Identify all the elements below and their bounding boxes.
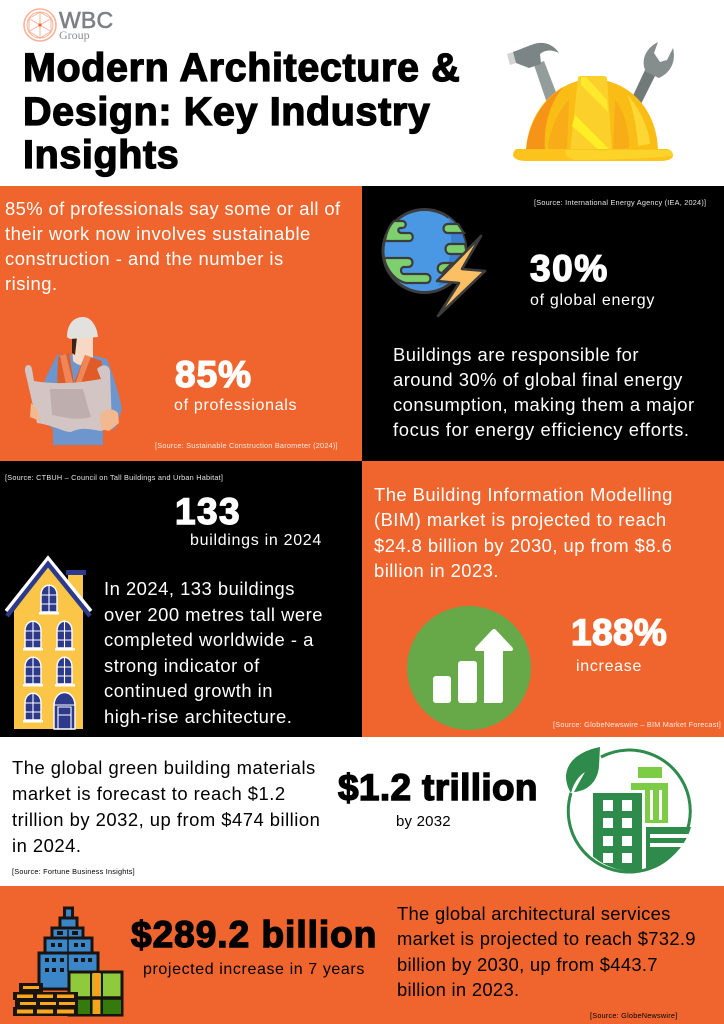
text block: continued growth in — [104, 680, 273, 701]
helmet centre stripe — [570, 76, 612, 152]
text block: rising. — [5, 273, 58, 294]
source: [Source: International Energy Agency (IEA, 2024)] — [534, 198, 706, 207]
helmet brim — [513, 149, 673, 161]
stat: 85% — [174, 354, 297, 414]
stat: 188% — [571, 612, 667, 675]
text block: consumption, making them a major — [393, 394, 695, 415]
panel: architectural services — [0, 886, 724, 1024]
text block: market is projected to reach $732.9 — [397, 928, 696, 949]
text block: billion in 2023. — [374, 560, 499, 581]
icon: green building with leaf — [566, 747, 692, 874]
text block: market is forecast to reach $1.2 — [12, 783, 286, 804]
header panel — [0, 0, 724, 186]
source: [Source: GlobeNewswire] — [590, 1011, 677, 1020]
text block: In 2024, 133 buildings — [104, 578, 295, 599]
title — [23, 46, 460, 178]
text block: billion in 2023. — [397, 979, 519, 1000]
stat: 133: buildings in 2024 — [190, 532, 322, 549]
stat: 188%: increase — [576, 658, 642, 675]
stat: $289.2 billion: $289.2 billion — [131, 914, 377, 955]
panel: BIM market — [362, 461, 724, 737]
title: Design: Key Industry — [23, 90, 430, 134]
source: [Source: GlobeNewswire – BIM Market Forecast] — [553, 720, 721, 729]
text block: completed worldwide - a — [104, 629, 314, 650]
source: [Source: Fortune Business Insights] — [12, 867, 135, 876]
panel: sustainable construction — [0, 186, 362, 461]
stat: 85%: 85% — [175, 354, 252, 395]
text block — [5, 198, 341, 294]
stat: 133 — [175, 491, 322, 549]
stat: $289.2 billion — [130, 914, 377, 978]
title: Modern Architecture & — [23, 46, 460, 90]
text block: The global green building materials — [12, 757, 316, 778]
text block — [397, 903, 696, 1000]
text block — [393, 344, 695, 440]
icon: helmet with hammer and wrench — [507, 42, 674, 161]
icon: engineer with blueprint — [24, 317, 122, 445]
title: Insights — [23, 133, 179, 177]
text block — [104, 578, 323, 727]
source: [Source: Sustainable Construction Barometer (2024)] — [155, 441, 338, 450]
stat: 30%: 30% — [530, 248, 609, 289]
helmet dome — [526, 80, 658, 150]
stat: $1.2 trillion: by 2032 — [396, 813, 451, 830]
stat: 30%: of global energy — [530, 292, 655, 309]
panel: global energy — [362, 186, 724, 461]
text block: The Building Information Modelling — [374, 484, 673, 505]
text block: focus for energy efficiency efforts. — [393, 419, 690, 440]
logo — [23, 7, 113, 42]
text block: Buildings are responsible for — [393, 344, 639, 365]
logo: WBC — [59, 7, 113, 33]
text block: The global architectural services — [397, 903, 671, 924]
icon: yellow townhouse — [4, 555, 92, 730]
icon: growth chart circle — [407, 606, 531, 730]
text block — [374, 484, 673, 581]
icon: wrench — [631, 42, 674, 106]
text block: construction - and the number is — [5, 248, 284, 269]
stat: $289.2 billion: projected increase in 7 years — [143, 961, 365, 978]
text block: over 200 metres tall were — [104, 604, 323, 625]
text block: in 2024. — [12, 835, 81, 856]
stat: 188%: 188% — [571, 612, 667, 653]
text block: 85% of professionals say some or all of — [5, 198, 341, 219]
panel: green building materials — [12, 747, 692, 876]
icon: skyscraper with coins and cash — [13, 906, 124, 1016]
text block: $24.8 billion by 2030, up from $8.6 — [374, 535, 672, 556]
text block: (BIM) market is projected to reach — [374, 509, 667, 530]
icon: earth with lightning bolt — [382, 208, 486, 318]
text block: trillion by 2032, up from $474 billion — [12, 809, 320, 830]
stat: $1.2 trillion: $1.2 trillion — [338, 767, 538, 808]
text block: their work now involves sustainable — [5, 223, 311, 244]
panel: tall buildings — [0, 461, 362, 737]
source: [Source: CTBUH – Council on Tall Buildings and Urban Habitat] — [5, 473, 223, 482]
stat: 30% — [530, 248, 655, 309]
stat: 85%: of professionals — [174, 397, 297, 414]
logo: Group — [59, 28, 90, 42]
text block: billion by 2030, up from $443.7 — [397, 954, 658, 975]
stat: $1.2 trillion — [338, 767, 538, 830]
text block — [12, 757, 320, 856]
text block: around 30% of global final energy — [393, 369, 683, 390]
text block: strong indicator of — [104, 655, 260, 676]
icon: hammer — [507, 43, 559, 106]
stat: 133: 133 — [175, 491, 241, 532]
text block: high-rise architecture. — [104, 706, 292, 727]
